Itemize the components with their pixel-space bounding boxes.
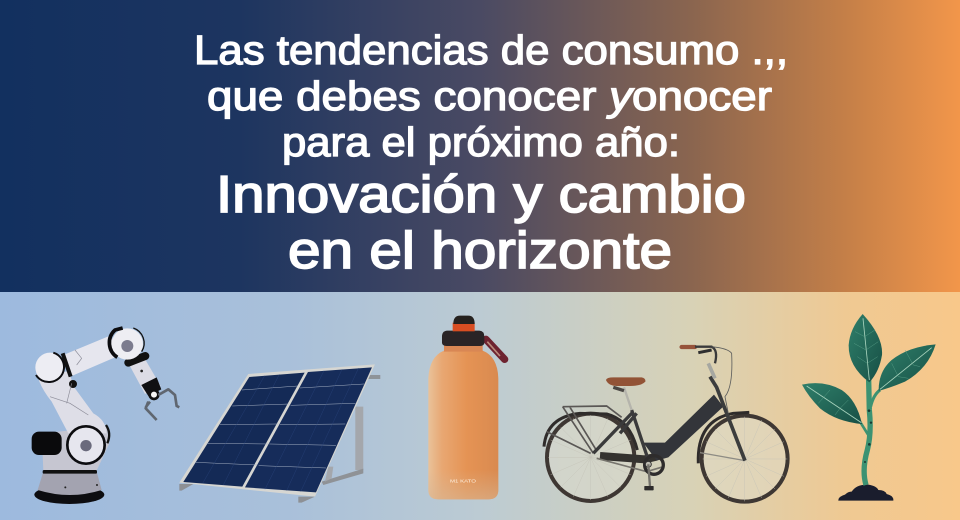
icon: bicycle [544,347,788,502]
title line 4: Innovación y cambio [216,166,746,224]
icon: sprout [802,314,936,501]
icon: solar panel [179,364,380,503]
icon: robot arm [32,328,179,504]
title line 3: para el próximo año: [282,119,680,165]
icon: water bottle [428,316,505,499]
title line 5: en el horizonte [288,222,672,280]
bottle label: M1 KATO [450,479,476,485]
title [194,27,788,280]
header band [0,0,960,292]
title line 1: Las tendencias de consumo .,, [194,27,788,73]
illustration band [0,292,960,520]
title line 2: que debes conocer yonocer [207,73,772,119]
